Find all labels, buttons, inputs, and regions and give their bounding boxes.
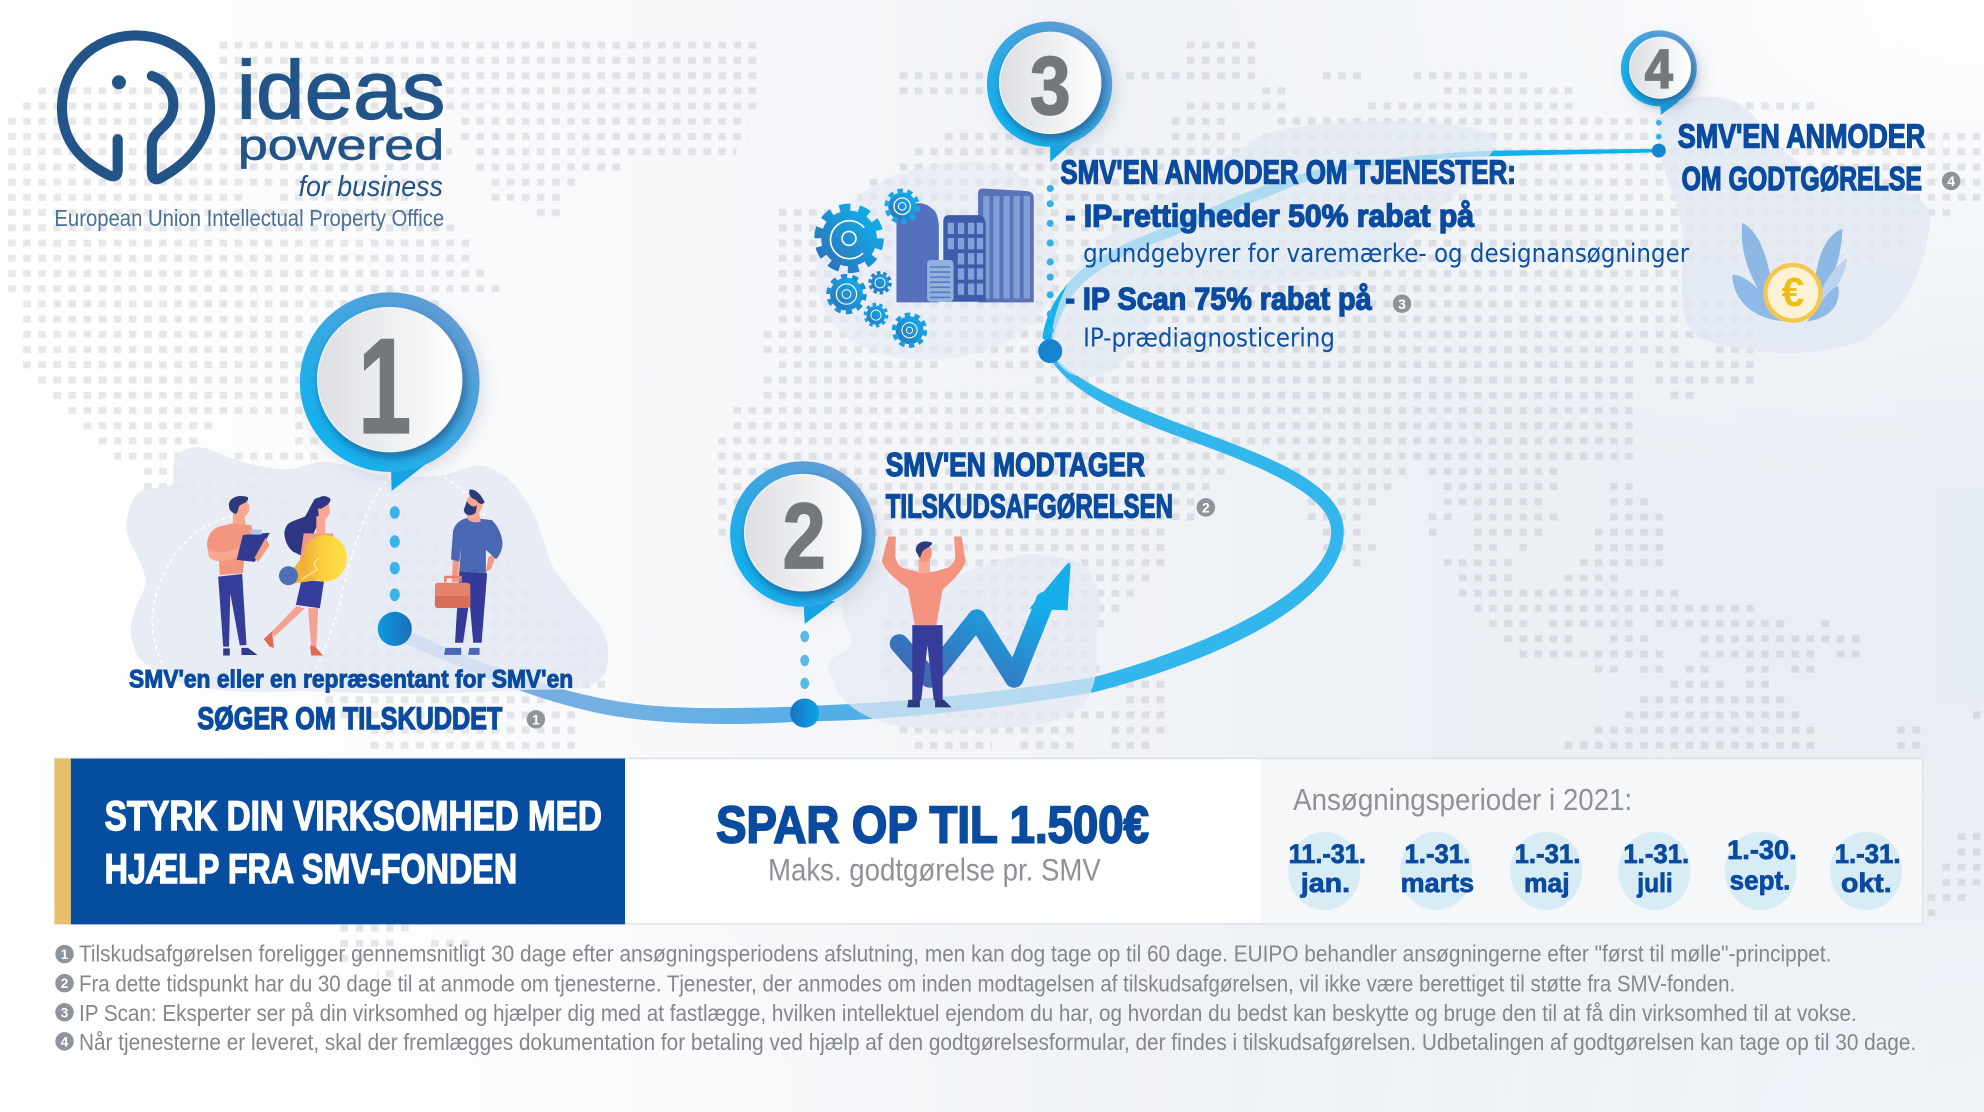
step 2 text: SMV'EN MODTAGER bbox=[886, 446, 1145, 483]
dashed orbit lines bbox=[152, 471, 487, 690]
connector dots: step 2 bbox=[790, 631, 819, 728]
application periods: Ansøgningsperioder i 2021: bbox=[1293, 784, 1632, 817]
coin: € bbox=[1782, 269, 1804, 315]
cheering man bbox=[882, 537, 965, 707]
logo word: ideas: ideas bbox=[237, 45, 445, 136]
pin 1 bbox=[300, 292, 480, 491]
curved road: step 1 to step 2 bbox=[402, 630, 805, 724]
step 1 text: SØGER OM TILSKUDDET bbox=[197, 700, 502, 736]
pin 4 bbox=[1621, 30, 1697, 115]
buildings bbox=[896, 189, 1034, 302]
pin 3: 3 bbox=[1030, 41, 1070, 132]
period dates: marts bbox=[1401, 868, 1474, 898]
step 2 text: TILSKUDSAFGØRELSEN bbox=[886, 488, 1173, 525]
footnote 1: 1 bbox=[61, 946, 69, 962]
period dates: 1.-31. bbox=[1515, 839, 1580, 869]
step 3 text: SMV'EN ANMODER OM TJENESTER: bbox=[1060, 153, 1516, 190]
note marker 1 bbox=[527, 710, 545, 729]
period dates: 1.-31. bbox=[1835, 839, 1900, 869]
growth arrow bbox=[899, 563, 1070, 678]
step 2 text bbox=[886, 446, 1215, 525]
savings amount: Maks. godtgørelse pr. SMV bbox=[768, 852, 1101, 888]
note marker 4: 4 bbox=[1947, 173, 1955, 189]
application periods bbox=[1288, 784, 1902, 910]
savings amount bbox=[716, 796, 1149, 888]
curved road: step 2 to step 3 bbox=[805, 354, 1344, 721]
period dates: maj bbox=[1524, 868, 1570, 898]
period dates: 1.-30. bbox=[1727, 835, 1797, 865]
logo: Ideas Powered for business bbox=[54, 35, 445, 231]
period dates: 1.-31. bbox=[1623, 839, 1689, 869]
large gear bbox=[819, 208, 879, 269]
logo word: for business: for business bbox=[299, 171, 443, 203]
blob: step 3 text backdrop bbox=[1052, 121, 1496, 377]
period dates: okt. bbox=[1841, 868, 1892, 898]
connector dots: step 4 bbox=[1652, 120, 1666, 158]
connector dots: step 1 bbox=[378, 506, 412, 646]
note marker 3 bbox=[1393, 294, 1411, 313]
step 1 text: SMV'en eller en repræsentant for SMV'en bbox=[129, 666, 573, 694]
curved road: step 3 to step 4 bbox=[1043, 149, 1659, 342]
footnote 2: Fra dette tidspunkt har du 30 dage til at anmode om tjenesterne. Tjenester, der anmodes om inden modtagelsen af tilskudsafgørelsen, vil ikke være berettiget til støtte fra SMV-fonden. bbox=[79, 970, 1735, 996]
connector dots: step 3 bbox=[1038, 185, 1062, 363]
step 4 illustration: euro coin with leaves bbox=[1732, 223, 1847, 323]
note marker 2: 2 bbox=[1202, 499, 1210, 515]
note marker 4 bbox=[1942, 172, 1960, 190]
person with clipboard bbox=[207, 496, 270, 655]
blob: step 3 gears backdrop bbox=[817, 162, 1057, 360]
step 3 illustration: gears and buildings bbox=[819, 189, 1034, 345]
period dates: 11.-31. bbox=[1289, 839, 1366, 869]
pin 2 bbox=[730, 461, 876, 624]
footnote 3: 3 bbox=[61, 1004, 69, 1020]
pin 2: 2 bbox=[783, 484, 826, 588]
step 3 text bbox=[1060, 153, 1689, 354]
step 3 text: - IP-rettigheder 50% rabat på bbox=[1065, 198, 1474, 234]
step 4 text: SMV'EN ANMODER bbox=[1678, 117, 1925, 154]
step 3 text: - IP Scan 75% rabat på bbox=[1065, 280, 1372, 316]
period dates: sept. bbox=[1730, 866, 1790, 896]
period dates: jan. bbox=[1300, 868, 1350, 898]
note marker 3: 3 bbox=[1398, 296, 1406, 312]
period circles bbox=[1288, 832, 1902, 910]
step 3 text: grundgebyrer for varemærke- og designansøgninger bbox=[1083, 239, 1689, 269]
bottom banner bbox=[54, 758, 1923, 925]
period dates: 1.-31. bbox=[1404, 839, 1470, 869]
banner headline: STYRK DIN VIRKSOMHED MED bbox=[105, 792, 602, 839]
period dates bbox=[1289, 835, 1900, 898]
blob: step 1 backdrop bbox=[126, 447, 608, 693]
logo word: powered: powered bbox=[238, 121, 444, 169]
note marker 2 bbox=[1197, 498, 1215, 517]
blob: step 4 backdrop bbox=[1659, 97, 1930, 353]
banner headline bbox=[105, 792, 602, 892]
pin 3 bbox=[987, 22, 1112, 162]
step 2 illustration: growth arrow and man bbox=[882, 537, 1070, 707]
logo word: EUIPO: European Union Intellectual Property Office bbox=[54, 205, 444, 231]
logo symbol bbox=[62, 35, 210, 179]
pin 4: 4 bbox=[1645, 38, 1673, 99]
note marker 1: 1 bbox=[532, 711, 540, 727]
blob: step 2 backdrop bbox=[828, 554, 1100, 730]
step 1 illustration: people bbox=[152, 471, 503, 690]
footnote 4: 4 bbox=[61, 1033, 69, 1049]
footnotes bbox=[55, 941, 1916, 1055]
pin 1: 1 bbox=[358, 310, 411, 462]
banner headline: HJÆLP FRA SMV-FONDEN bbox=[105, 845, 517, 892]
period dates: juli bbox=[1636, 868, 1673, 898]
footnote 2: 2 bbox=[61, 975, 69, 991]
leaves bbox=[1732, 223, 1847, 321]
step 1 text bbox=[129, 666, 573, 736]
step 4 text bbox=[1678, 117, 1960, 197]
savings amount: SPAR OP TIL 1.500€ bbox=[716, 796, 1149, 854]
woman with light bulb bbox=[264, 496, 347, 655]
step 3 text: IP-prædiagnosticering bbox=[1083, 324, 1335, 354]
small gears bbox=[829, 191, 925, 345]
man with briefcase bbox=[435, 490, 503, 655]
